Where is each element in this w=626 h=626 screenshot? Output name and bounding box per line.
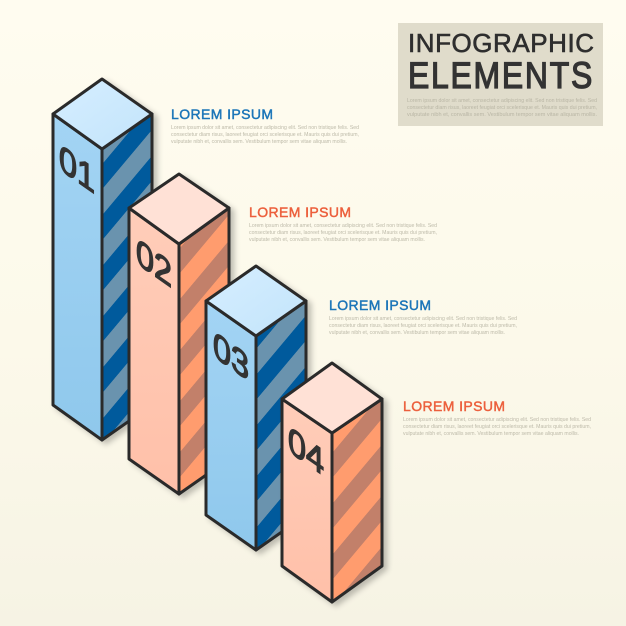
bar 02 shape: [129, 174, 229, 494]
bar 01 shape: [53, 79, 152, 440]
label 4: Lorem ipsum dolor sit amet, consectetur adipiscing elit. Sed non tristique felis. Sed: [403, 417, 591, 423]
label 4: LOREM IPSUM: [403, 398, 505, 414]
bar 02: [129, 174, 229, 494]
number 04: 04: [288, 418, 324, 484]
bar 01: [53, 79, 152, 440]
label 2: vulputate nibh et, convallis sem. Vestibulum tempor sem vitae aliquam mollis.: [249, 237, 425, 243]
label 1: LOREM IPSUM: [171, 106, 273, 122]
label 2: LOREM IPSUM: [249, 204, 351, 220]
number 02: 02: [136, 230, 172, 296]
label 2: consectetur diam risus, laoreet feugiat orci scelerisque et. Mauris quis dui pretium,: [249, 230, 437, 236]
label 1: [171, 106, 359, 145]
label 3: consectetur diam risus, laoreet feugiat orci scelerisque et. Mauris quis dui pretium,: [329, 323, 517, 329]
label 2: Lorem ipsum dolor sit amet, consectetur adipiscing elit. Sed non tristique felis. Sed: [249, 223, 437, 229]
title panel: [398, 23, 603, 126]
label 4: [403, 398, 591, 437]
number 03: 03: [213, 323, 249, 389]
bar 03: [206, 266, 306, 550]
bar 04 shape: [282, 363, 382, 602]
title body text: Lorem ipsum dolor sit amet, consectetur adipiscing elit. Sed non tristique felis. Sed: [407, 98, 597, 104]
label 4: consectetur diam risus, laoreet feugiat orci scelerisque et. Mauris quis dui pretium,: [403, 424, 591, 430]
number 01: 01: [59, 136, 95, 202]
title: elements: ELEMENTS: [408, 55, 594, 96]
label 1: Lorem ipsum dolor sit amet, consectetur adipiscing elit. Sed non tristique felis. Sed: [171, 125, 359, 131]
label 3: Lorem ipsum dolor sit amet, consectetur adipiscing elit. Sed non tristique felis. Sed: [329, 316, 517, 322]
bar 03 shape: [206, 266, 306, 550]
label 2: [249, 204, 437, 243]
label 4: vulputate nibh et, convallis sem. Vestibulum tempor sem vitae aliquam mollis.: [403, 431, 579, 437]
title body text: vulputate nibh et, convallis sem. Vestibulum tempor sem vitae aliquam mollis.: [407, 112, 597, 118]
bar 04: [282, 363, 382, 602]
label 3: [329, 297, 517, 336]
title body text: [407, 98, 597, 118]
label 1: vulputate nibh et, convallis sem. Vestibulum tempor sem vitae aliquam mollis.: [171, 139, 347, 145]
title body text: consectetur diam risus, laoreet feugiat orci scelerisque et. Mauris quis dui pretium,: [407, 105, 597, 111]
label 3: vulputate nibh et, convallis sem. Vestibulum tempor sem vitae aliquam mollis.: [329, 330, 505, 336]
label 3: LOREM IPSUM: [329, 297, 431, 313]
title: infographic: INFOGRAPHIC: [408, 28, 594, 58]
label 1: consectetur diam risus, laoreet feugiat orci scelerisque et. Mauris quis dui pretium,: [171, 132, 359, 138]
